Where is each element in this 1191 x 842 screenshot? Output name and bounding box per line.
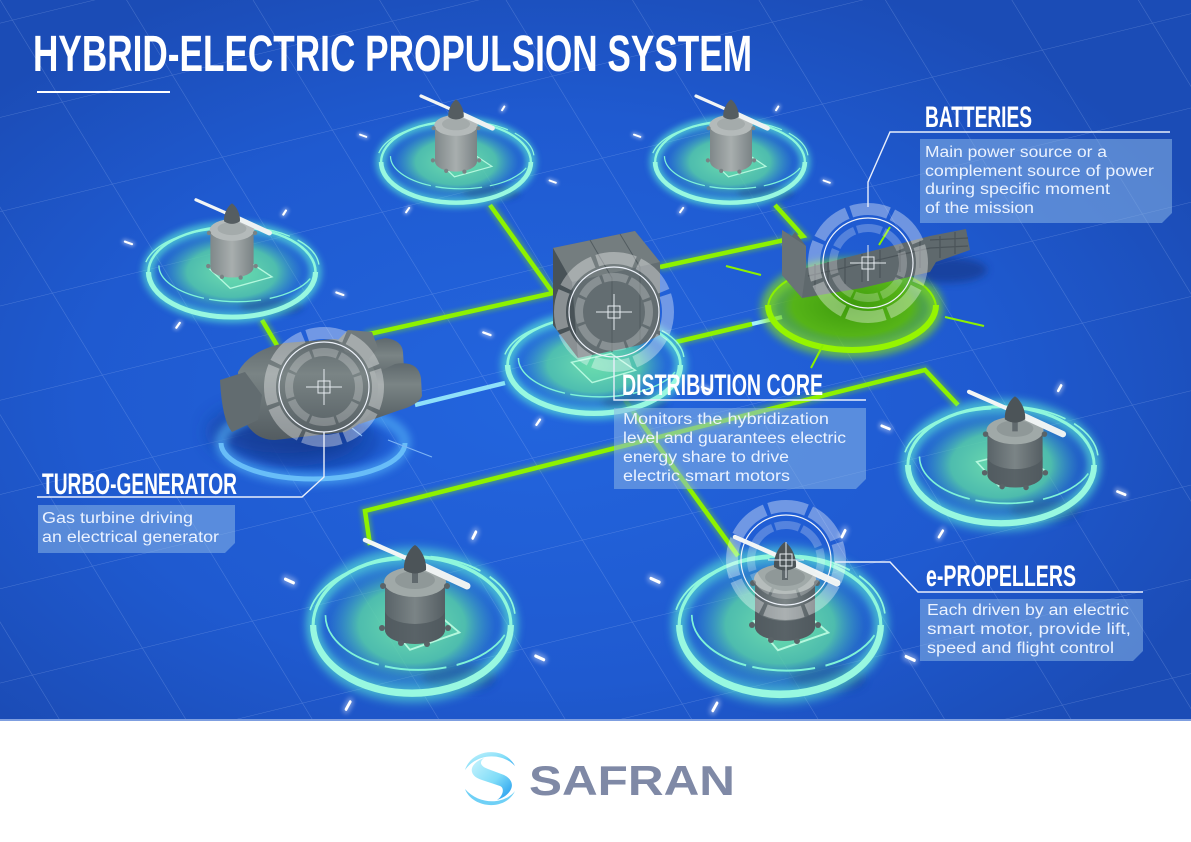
callout: e-propellers: e-PROPELLERS <box>926 560 1076 593</box>
callout: batteries: Main power source or a <box>925 144 1107 161</box>
callout: distribution core: DISTRIBUTION CORE <box>622 369 823 402</box>
callout: e-propellers <box>835 560 1143 661</box>
targeting reticle: turbo-generator <box>270 333 378 441</box>
e-propeller unit: top left <box>125 200 343 328</box>
callout: turbo-generator: an electrical generator <box>42 529 219 546</box>
targeting reticle: distribution core <box>560 258 668 366</box>
turbo-generator ring <box>210 404 432 479</box>
logo wordmark: SAFRAN <box>529 757 735 804</box>
batteries ring <box>726 227 984 368</box>
e-propeller unit: top right <box>634 96 830 212</box>
footer: Safran logo <box>465 752 735 805</box>
callout: batteries: during specific moment <box>925 181 1111 198</box>
distribution core ring <box>483 299 709 425</box>
callout: turbo-generator <box>37 432 324 553</box>
targeting reticle: batteries <box>814 209 922 317</box>
callout: e-propellers: smart motor, provide lift, <box>927 621 1131 638</box>
callout: distribution core: energy share to drive <box>623 449 789 466</box>
title underline <box>37 91 170 93</box>
callout: distribution core <box>614 358 866 489</box>
e-propeller unit: top centre <box>360 96 556 212</box>
logo symbol <box>465 752 515 805</box>
callout: e-propellers: speed and flight control <box>927 640 1114 657</box>
e-propeller unit: bottom left <box>285 532 544 709</box>
green power connection lines <box>262 205 958 556</box>
machine: battery pack <box>782 229 987 298</box>
callout: batteries: complement source of power <box>925 163 1154 180</box>
callout: distribution core: level and guarantees electric <box>623 430 846 447</box>
callout: e-propellers: Each driven by an electric <box>927 602 1129 619</box>
callout: batteries: BATTERIES <box>925 101 1032 134</box>
callout: batteries <box>868 101 1172 223</box>
callout: distribution core: Monitors the hybridization <box>623 411 829 428</box>
callout: turbo-generator: Gas turbine driving <box>42 510 193 527</box>
callout: turbo-generator: TURBO-GENERATOR <box>42 468 237 501</box>
e-propeller unit: right <box>882 386 1125 537</box>
machine: turbo-generator <box>220 330 422 440</box>
title: HYBRID-ELECTRIC PROPULSION SYSTEM <box>33 25 752 82</box>
callout: batteries: of the mission <box>925 200 1034 217</box>
e-propeller unit: bottom right <box>651 530 914 711</box>
targeting reticle: e-propellers <box>732 506 840 614</box>
callout: distribution core: electric smart motors <box>623 468 790 485</box>
machine: distribution core cube <box>553 231 660 358</box>
